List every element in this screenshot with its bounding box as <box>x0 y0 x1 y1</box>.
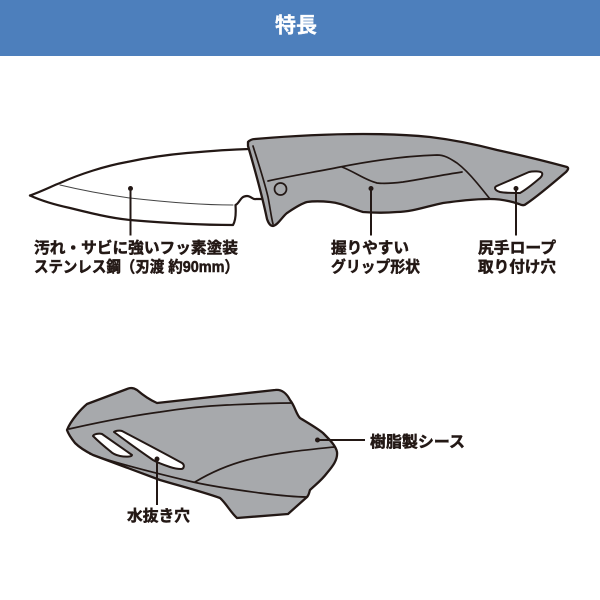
rivet <box>274 183 286 195</box>
knife blade <box>30 149 262 225</box>
title: 特長 <box>275 14 317 38</box>
lanyard hole <box>495 171 542 193</box>
label: lanyard line 2: 取り付け穴 <box>478 257 556 276</box>
knife handle <box>248 134 568 226</box>
callout: blade leader <box>128 186 133 236</box>
label: blade material: ステンレス鋼（刃渡 約90mm） <box>34 258 239 276</box>
callout: lanyard leader <box>514 186 518 236</box>
label: grip line 1: 握りやすい <box>331 238 409 257</box>
label: lanyard line 1: 尻手ロープ <box>478 238 556 257</box>
label: grip line 2: グリップ形状 <box>331 257 420 276</box>
callout: grip leader <box>368 186 374 236</box>
header band <box>0 0 600 56</box>
water hole long <box>114 431 184 469</box>
sheath body <box>67 388 337 518</box>
callout: drain hole leader <box>154 456 160 505</box>
label: sheath: 樹脂製シース <box>370 432 465 451</box>
label: drain hole: 水抜き穴 <box>127 506 190 525</box>
sheath contour lines <box>69 403 334 497</box>
callout: sheath leader <box>315 438 365 442</box>
handle inner lines <box>253 146 490 224</box>
illustration: knife <box>30 134 568 226</box>
water hole small <box>93 434 132 457</box>
label: blade: 汚れ・サビに強いフッ素塗装 <box>34 238 238 257</box>
illustration: sheath <box>67 388 337 518</box>
